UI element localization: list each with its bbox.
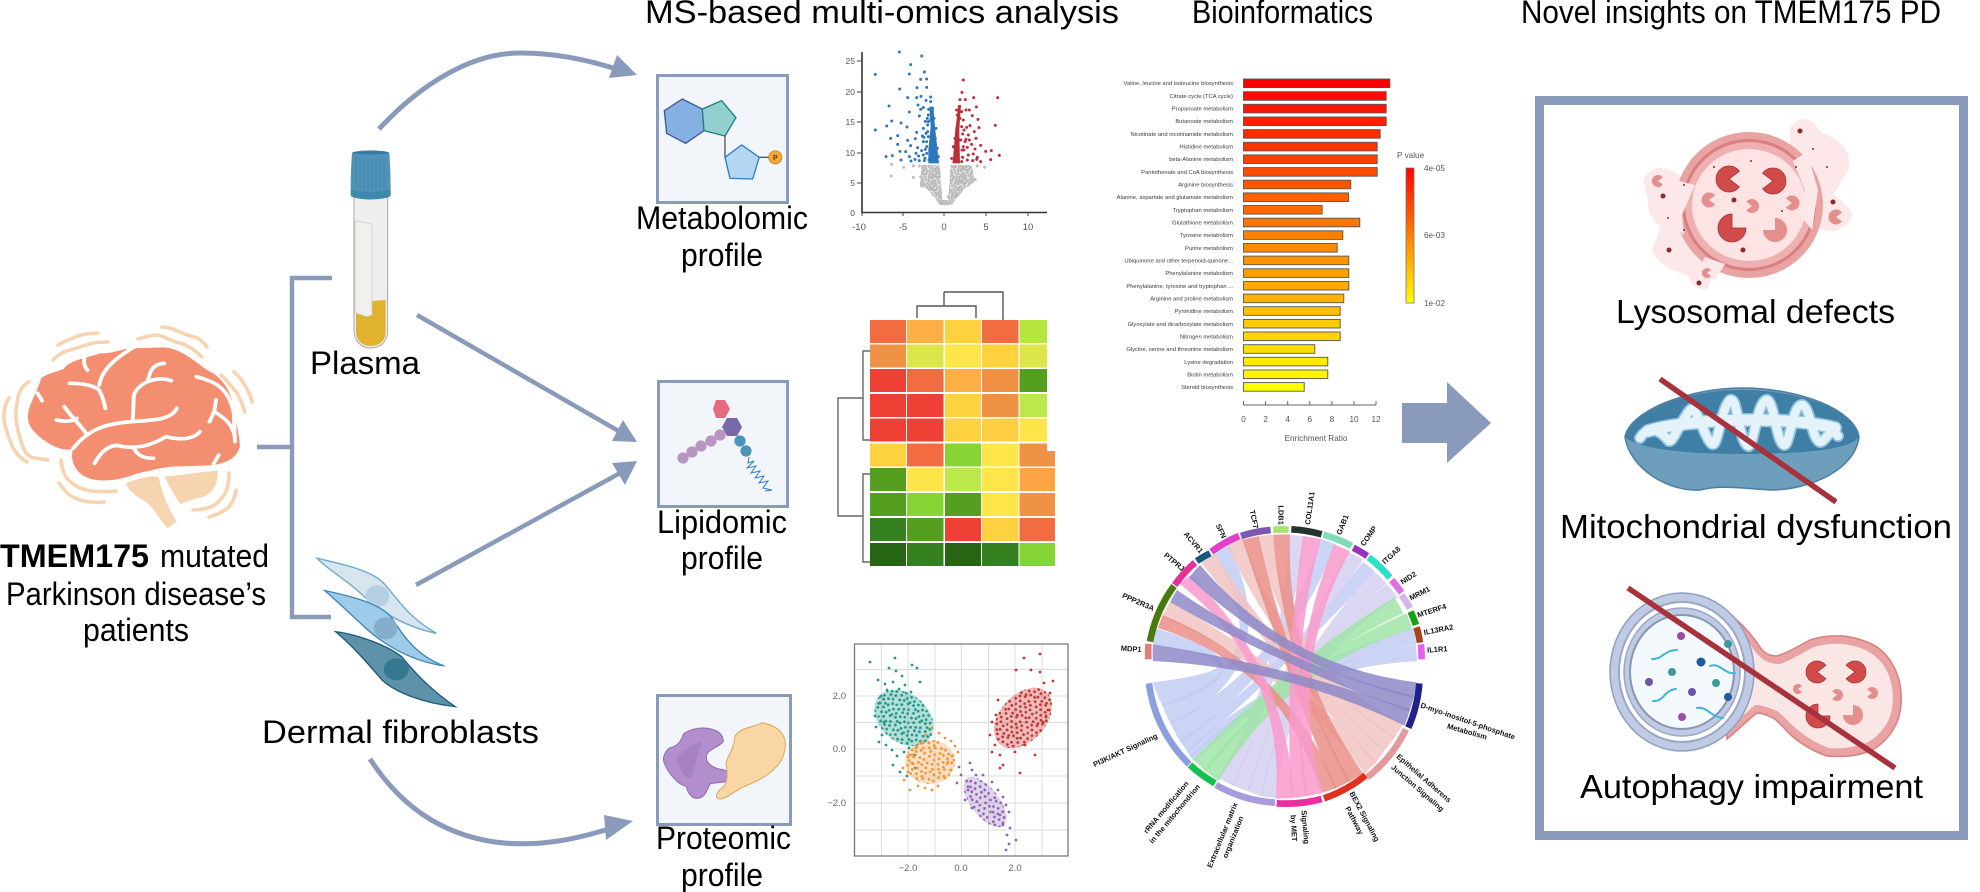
x axis: 2 [1263,415,1268,424]
P value legend [1397,151,1445,308]
label: Lipidomic profile: Lipidomic [657,504,787,540]
pathway labels: Butanoate metabolism [1175,119,1233,125]
chart: enrichment bar chart [1117,79,1445,443]
scatter tick labels: 0.0 [954,863,968,874]
volcano axes: 20 [846,87,855,97]
pathway labels: Arginine and proline metabolism [1150,296,1233,302]
arrow: fibroblasts to proteomic [370,759,633,844]
chord labels: PTPRJ [1162,551,1186,573]
icon: lysosome [1643,119,1852,289]
volcano axes: 10 [846,148,855,158]
label: Metabolomic profile [636,200,808,273]
pathway labels [1117,81,1233,391]
chord labels: COL11A1 [1303,491,1317,525]
patient label: mutated [160,538,269,574]
chord labels: TCF7 [1248,509,1260,529]
x axis: 8 [1330,415,1335,424]
volcano axes: 5 [850,178,855,188]
pathway labels: Purine metabolism [1185,246,1233,252]
strike: autophagy [1628,588,1895,768]
scatter tick labels: 0.0 [833,744,846,755]
red cluster [982,654,1064,773]
upregulated points [952,80,999,163]
patient label: TMEM175 [0,538,149,574]
patient label: Parkinson disease’s [6,576,266,612]
arrow: large block arrow to insights [1402,382,1491,463]
pathway labels: Citrate cycle (TCA cycle) [1170,94,1233,100]
arrow: fibroblasts to lipidomic [416,461,637,585]
label: Lysosomal defects: Lysosomal defects [1616,293,1895,330]
chord labels: rRNA modification [1142,779,1191,835]
label: Metabolomic profile: profile [681,237,763,273]
pathway labels: Lysine degradation [1184,360,1233,366]
chart: chord diagram [1092,491,1516,869]
pathway labels: Phenylalanine, tyrosine and tryptophan ... [1126,284,1233,290]
pathway labels: Glycine, serine and threonine metabolism [1126,347,1233,353]
chord labels: IL1R1 [1427,644,1448,655]
heatmap dendrogram top [917,292,1003,320]
heatmap dendrogram left [838,351,870,562]
patient label: patients [83,612,189,648]
chord labels: Extracellular matrix [1205,800,1240,869]
pathway labels: Valine, leucine and isoleucine biosynthesis [1124,81,1233,87]
x axis: 6 [1308,415,1313,424]
pathway labels: Glyoxylate and dicarboxylate metabolism [1128,322,1233,328]
scatter tick labels: 2.0 [1008,863,1022,874]
label: Lipidomic profile [657,504,787,576]
chord labels: LDB1 [1277,505,1286,525]
pathway labels: Ubiquinone and other terpenoid-quinone... [1124,258,1233,264]
chart: PCA scatter [827,644,1068,874]
chord labels: Pathway [1343,805,1366,837]
pathway labels: Glutathione metabolism [1172,220,1233,226]
pathway labels: Nicotinate and nicotinamide metabolism [1131,132,1233,138]
bracket connector from brain to samples [257,278,332,617]
orange cluster [903,728,958,790]
chord labels: Epithelial Adherens [1395,752,1453,804]
chord labels: ITGA8 [1380,545,1402,566]
label: Proteomic profile: Proteomic [656,820,791,856]
volcano axes: 0 [850,208,855,218]
x axis: 12 [1371,415,1381,424]
chord labels: organization [1220,814,1246,859]
volcano axes: -5 [899,222,907,233]
chord labels: GAB1 [1334,513,1351,536]
volcano axes: -10 [852,222,866,233]
volcano axes [846,52,1047,233]
scatter grid [855,644,1068,856]
teal cluster [863,658,945,776]
icon: mitochondrion [1625,388,1859,490]
P value legend: 1e-02 [1424,299,1445,308]
scatter tick labels: 2.0 [833,691,846,702]
label: Proteomic profile [656,820,791,892]
pathway labels: beta-Alanine metabolism [1169,157,1233,163]
icon: autophagy fusion [1610,593,1901,756]
chord labels: D-myo-inositol-5-phosphate [1419,701,1516,742]
pathway labels: Tryptophan metabolism [1173,208,1233,214]
chord labels: PPP2R3A [1121,591,1156,613]
pathway labels: Tyrosine metabolism [1180,233,1233,239]
strike: mitochondria [1660,379,1836,502]
P value legend: 6e-03 [1424,231,1445,240]
purple cluster [955,763,1016,850]
scatter tick labels: −2.0 [827,798,846,809]
x axis: Enrichment Ratio [1285,434,1348,443]
x axis: 4 [1285,415,1290,424]
downregulated points [875,52,939,163]
label: Mitochondrial dysfunction: Mitochondrial dysfunction [1560,508,1952,545]
x axis: 10 [1349,415,1359,424]
pathway labels: Propanoate metabolism [1172,106,1233,112]
panel: metabolomic icon: P [773,155,778,162]
pathway labels: Alanine, aspartate and glutamate metabolism [1117,195,1233,201]
chord labels: COMP [1359,524,1379,548]
scatter tick labels: −2.0 [899,863,917,874]
panel: proteomic icon [658,696,790,824]
non-significant points [891,164,985,205]
chord labels: NID2 [1399,569,1418,586]
pathway labels: Phenylalanine metabolism [1165,271,1233,277]
P value legend: 4e-05 [1424,164,1445,173]
chord labels: Metabolism [1446,722,1488,742]
arrow: plasma to lipidomic [417,315,637,442]
chord labels: Junction Signaling [1389,763,1446,814]
chord labels [1092,491,1516,869]
pathway labels: Biotin metabolism [1187,372,1233,378]
scatter frame [854,644,1068,856]
chord labels: by MET [1289,815,1299,842]
scatter tick labels [827,691,1022,874]
label: Plasma: Plasma [310,345,420,381]
label: Metabolomic profile: Metabolomic [636,200,808,236]
volcano axes: 25 [846,56,855,66]
volcano axes: 15 [846,117,855,127]
volcano axes: 0 [941,222,947,233]
chord labels: MRM1 [1408,584,1432,602]
chart: lipid heatmap [838,292,1055,566]
label: Dermal fibroblasts: Dermal fibroblasts [262,714,539,750]
pathway labels: Pantothenate and CoA biosynthesis [1141,170,1233,176]
pathway labels: Histidine metabolism [1180,144,1233,150]
arrow: plasma to metabolomic [379,53,637,129]
volcano axes: 5 [983,222,989,233]
icon: dermal fibroblasts [317,558,455,707]
chord labels: ACVR1 [1182,530,1205,555]
bars [1244,79,1390,391]
chord labels: MTERF4 [1416,601,1448,620]
pathway labels: Nitrogen metabolism [1180,334,1233,340]
patient label [0,538,269,648]
label: Proteomic profile: profile [681,857,763,892]
panel: novel insights frame [1540,100,1964,836]
P value legend: P value [1397,151,1425,160]
chord labels: IL13RA2 [1423,622,1454,637]
pathway labels: Arginine biosynthesis [1178,182,1233,188]
chord labels: Signaling [1299,810,1311,845]
panel: lipidomic icon [658,382,788,506]
chord labels: BEX2 Signaling [1348,790,1382,843]
chord labels: SFN [1214,522,1228,540]
chord labels: in the mitochondrion [1147,782,1202,845]
label: Lipidomic profile: profile [681,540,763,576]
pathway labels: Steroid biosynthesis [1181,385,1233,391]
icon: plasma tube [351,150,391,348]
chord ribbons [1154,536,1416,797]
panel: metabolomic icon [658,76,788,202]
volcano axes: 10 [1023,222,1033,233]
heatmap cells [870,320,1055,566]
chord labels: PI3K/AKT Signaling [1092,731,1159,769]
chord outer ring [1148,529,1422,804]
x axis: 0 [1241,415,1246,424]
chart: volcano plot [846,52,1047,233]
pathway labels: Pyrimidine metabolism [1175,309,1233,315]
x axis [1241,401,1381,443]
label: Autophagy impairment: Autophagy impairment [1580,768,1923,805]
icon: brain [4,327,252,528]
chord labels: MDP1 [1121,644,1142,654]
